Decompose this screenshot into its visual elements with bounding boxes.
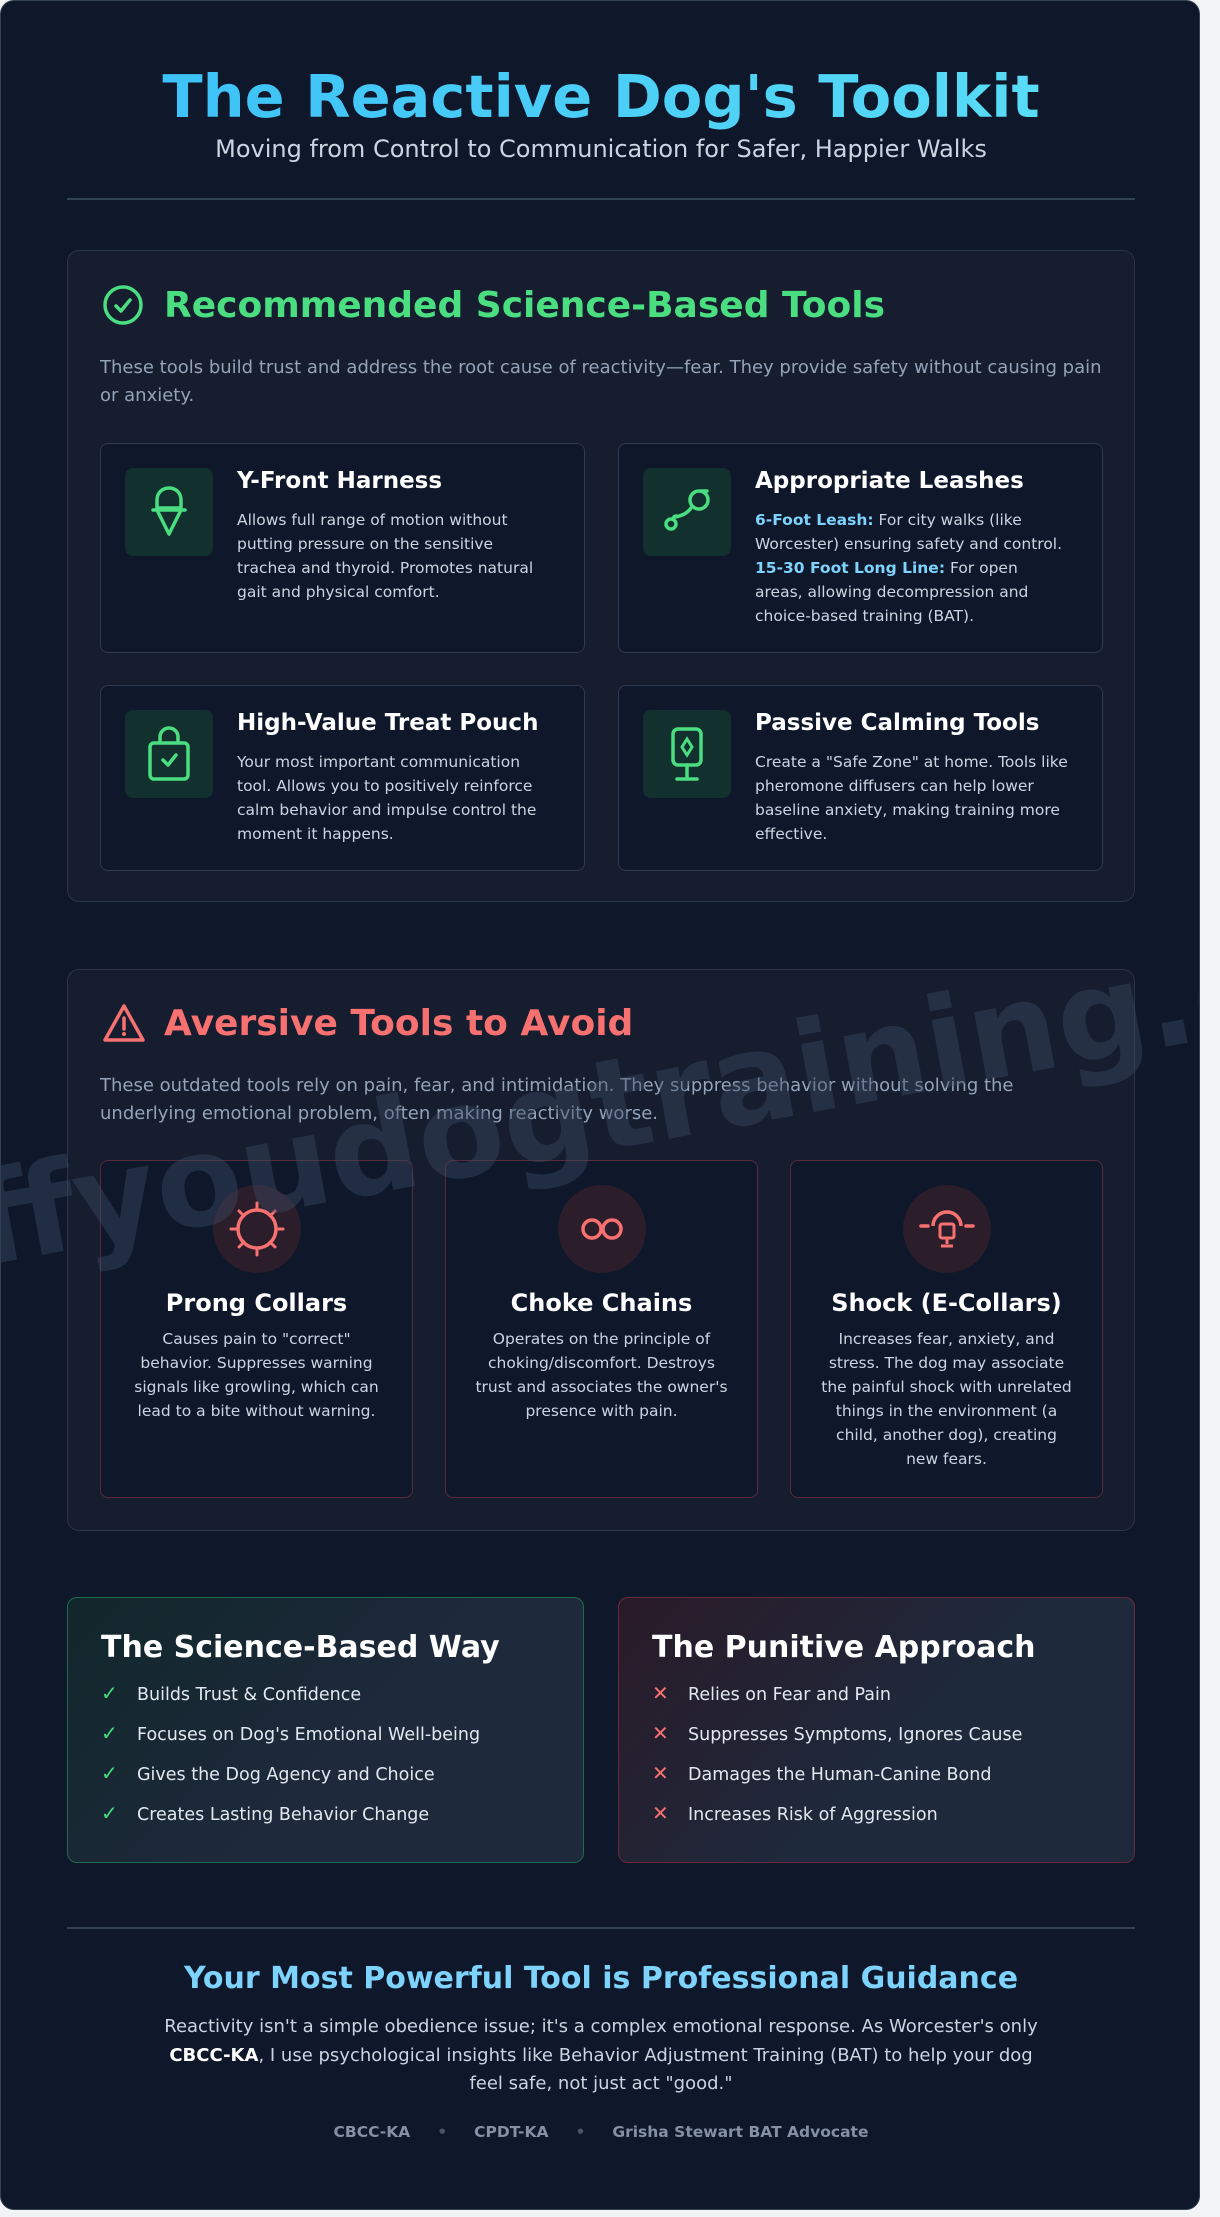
panel: aversive tools xyxy=(67,969,1135,1531)
list: harms: Damages the Human-Canine Bond xyxy=(688,1765,991,1785)
card: shock collars: Shock (E-Collars) xyxy=(831,1289,1062,1317)
card: treat pouch xyxy=(100,685,585,871)
panel: punitive approach: The Punitive Approach xyxy=(652,1630,1036,1665)
list: benefits: ✓ xyxy=(101,1681,118,1705)
icon: leash xyxy=(643,468,731,556)
list: harms: ✕ xyxy=(652,1761,669,1785)
card: harness: Y-Front Harness xyxy=(237,468,442,494)
card: prong collars: Causes pain to "correct" behavior. Suppresses warning signals like growling, which can lead to a bite without warning. xyxy=(134,1330,379,1420)
title: The Reactive Dog's Toolkit xyxy=(162,62,1040,131)
card: leashes: areas, allowing decompression and choice-based training (BAT). xyxy=(755,583,1028,625)
icon: check circle xyxy=(103,285,143,325)
card: treat pouch: tool. Allows you to positively reinforce calm behavior and impulse control the moment it happens. xyxy=(237,777,536,843)
footer heading: Your Most Powerful Tool is Professional Guidance xyxy=(184,1961,1018,1996)
list: benefits: ✓ xyxy=(101,1721,118,1745)
list: benefits: Creates Lasting Behavior Change xyxy=(137,1805,429,1825)
card: harness xyxy=(100,443,585,653)
icon: harness xyxy=(125,468,213,556)
card: leashes: 6-Foot Leash: For city walks (like Worcester) ensuring safety and control. 15-30 Foot Long Line: For open xyxy=(755,511,1062,577)
card: choke chains xyxy=(445,1160,758,1498)
icon: prong xyxy=(213,1185,301,1273)
icon: e-collar xyxy=(903,1185,991,1273)
card: treat pouch: High-Value Treat Pouch xyxy=(237,710,538,736)
card: prong collars: Prong Collars xyxy=(166,1289,347,1317)
list: benefits: Gives the Dog Agency and Choice xyxy=(137,1765,435,1785)
list: benefits: Focuses on Dog's Emotional Well-being xyxy=(137,1725,480,1745)
list: harms: ✕ xyxy=(652,1681,669,1705)
card: harness: Allows full range of motion without putting pressure on the sensitive trachea and thyroid. Promotes natural gait and physical comfort. xyxy=(237,511,533,601)
card: prong collars xyxy=(100,1160,413,1498)
card: leashes: Appropriate Leashes xyxy=(755,468,1024,494)
card: choke chains: Operates on the principle of choking/discomfort. Destroys trust and associates the owner's presence with pain. xyxy=(475,1330,728,1420)
subtitle: Moving from Control to Communication for Safer, Happier Walks xyxy=(215,135,987,163)
list: benefits: Builds Trust & Confidence xyxy=(137,1685,361,1705)
panel: punitive approach xyxy=(618,1597,1135,1863)
intro text: These tools build trust and address the root cause of reactivity—fear. They provide safety without causing pain or anxiety. xyxy=(100,357,1102,406)
card: calming tools xyxy=(618,685,1103,871)
list: benefits xyxy=(101,1681,480,1825)
card: shock collars xyxy=(790,1160,1103,1498)
card: treat pouch: Your most important communication xyxy=(237,753,520,771)
title xyxy=(1,59,1201,135)
intro text: These outdated tools rely on pain, fear, and intimidation. They suppress behavior without solving the underlying emotional problem, often making reactivity worse. xyxy=(100,1075,1014,1124)
card: leashes xyxy=(618,443,1103,653)
list: harms: Relies on Fear and Pain xyxy=(688,1685,891,1705)
icon: diffuser xyxy=(643,710,731,798)
credentials: CBCC-KA • CPDT-KA • Grisha Stewart BAT Advocate xyxy=(334,2123,868,2141)
card: shock collars: Increases fear, anxiety, and stress. The dog may associate the painful shock with unrelated things in the environment (a child, another dog), creating new fears. xyxy=(821,1330,1072,1468)
list: harms xyxy=(652,1681,1022,1825)
icon: chain xyxy=(558,1185,646,1273)
list: harms: ✕ xyxy=(652,1801,669,1825)
heading: aversive: Aversive Tools to Avoid xyxy=(164,1002,633,1044)
card: calming tools: Passive Calming Tools xyxy=(755,710,1039,736)
icon: pouch xyxy=(125,710,213,798)
card: choke chains: Choke Chains xyxy=(511,1289,692,1317)
panel: science-based way xyxy=(67,1597,584,1863)
panel: recommended tools xyxy=(67,250,1135,902)
list: benefits: ✓ xyxy=(101,1761,118,1785)
list: benefits: ✓ xyxy=(101,1801,118,1825)
card: calming tools: Create a "Safe Zone" at home. Tools like pheromone diffusers can help lower baseline anxiety, making training more effective. xyxy=(755,753,1068,843)
list: harms: ✕ xyxy=(652,1721,669,1745)
list: harms: Suppresses Symptoms, Ignores Cause xyxy=(688,1725,1022,1745)
panel: science-based way: The Science-Based Way xyxy=(101,1630,500,1665)
list: harms: Increases Risk of Aggression xyxy=(688,1805,938,1825)
heading: recommended: Recommended Science-Based Tools xyxy=(164,284,885,326)
footer text: Reactivity isn't a simple obedience issue; it's a complex emotional response. As Worcester's only CBCC-KA, I use psychological insights like Behavior Adjustment Training (BAT) to help your dog feel safe, not just act "good." xyxy=(164,2016,1038,2094)
icon: warning xyxy=(103,1004,145,1042)
